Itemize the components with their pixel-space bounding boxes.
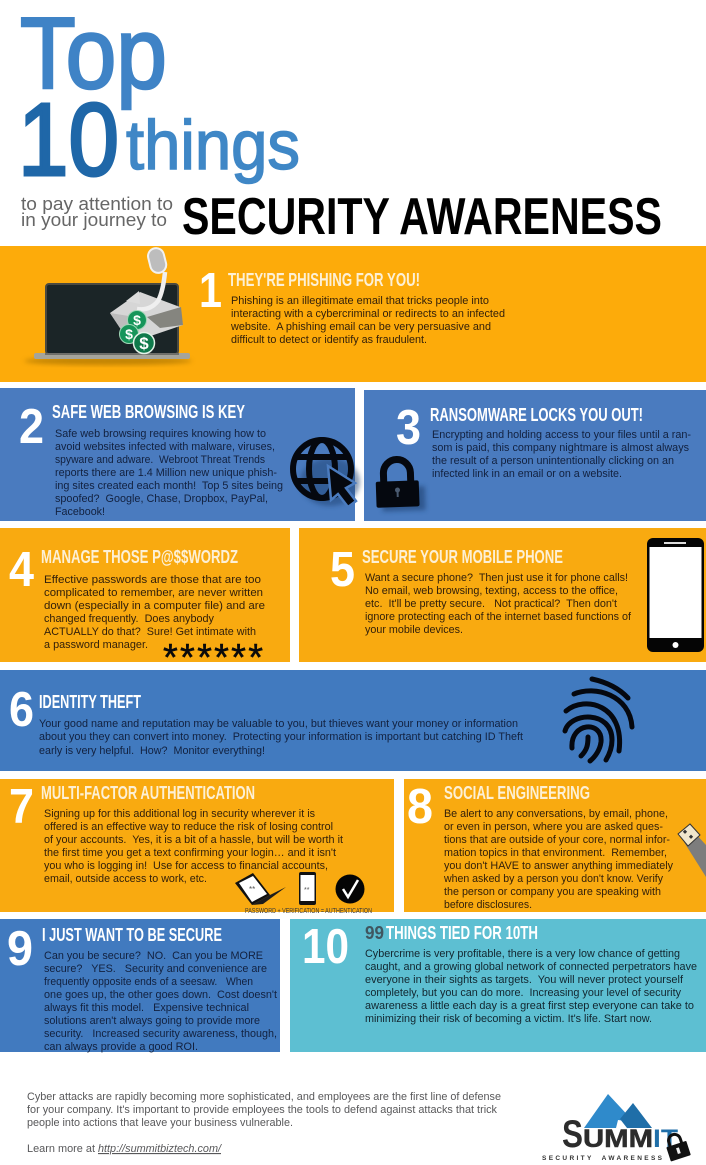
body 2: spoofed? Google, Chase, Dropbox, PayPal, xyxy=(55,493,268,505)
number 10: 10 xyxy=(302,920,349,974)
icon: logo padlock xyxy=(663,1131,691,1162)
footer text: http://summitbiztech.com/ xyxy=(98,1143,223,1155)
body 10: completely, but you can do more. Increasing your level of security xyxy=(365,987,681,999)
footer text: for your company. It's important to provide employees the tools to defend against attacks that trick xyxy=(27,1104,497,1116)
body 7: you who is logging in! Use for access to financial accounts, xyxy=(44,860,328,872)
subtitle: to pay attention to xyxy=(21,194,173,214)
body 8: the person or company you are speaking with xyxy=(444,886,661,898)
number 5: 5 xyxy=(330,543,355,597)
body 9: security. Increased security awareness, though, xyxy=(44,1028,277,1040)
body 6 xyxy=(39,718,524,757)
body 2: spyware and adware. Webroot Threat Trends xyxy=(55,454,265,466)
icon: check circle xyxy=(336,874,364,904)
body 3: the result of a person unintentionally clicking on an xyxy=(432,455,674,467)
body 5: your mobile devices. xyxy=(365,624,463,636)
body 8: when asked by a person you don't know. Verify xyxy=(443,873,663,885)
title number: 10: 10 xyxy=(18,82,119,197)
body 10 xyxy=(365,948,697,1025)
panel 1: phishing xyxy=(0,246,706,382)
body 10: minimizing their risk of becoming a victim. It's life. Start now. xyxy=(365,1013,652,1025)
body 9: Can you be secure? NO. Can you be MORE xyxy=(44,950,263,962)
icon: laptop with phishing email: $ xyxy=(139,334,149,353)
body 7: of your accounts. Yes, it is a bit of a hassle, but will be worth it xyxy=(44,834,344,846)
body 5 xyxy=(365,572,632,636)
logo: Summit Security Awareness: UMM xyxy=(583,1125,653,1153)
body 4 xyxy=(44,574,265,651)
body 9: secure? YES. Security and convenience are xyxy=(44,963,267,975)
body 2 xyxy=(55,428,283,518)
icon: mini laptop: ** xyxy=(249,885,255,894)
footer text: Learn more at xyxy=(27,1143,96,1155)
body 6: Your good name and reputation may be valuable to you, but thieves want your money or information xyxy=(39,718,518,730)
icon: usb stick xyxy=(678,824,706,877)
panel 2: safe web browsing xyxy=(0,388,360,521)
panel 8: social engineering xyxy=(404,779,706,912)
body 10: Cybercrime is very profitable, there is a very low chance of getting xyxy=(365,948,680,960)
title word: things: things xyxy=(126,106,300,184)
body 9: always fit this model. Expensive technical xyxy=(44,1002,249,1014)
icon: fingerprint xyxy=(565,679,632,761)
body 1 xyxy=(230,295,505,346)
footer text: people into actions that leave your business vulnerable. xyxy=(27,1117,293,1129)
icon: smartphone xyxy=(647,538,704,652)
number 7: 7 xyxy=(9,780,34,834)
logo: Summit Security Awareness: IT xyxy=(653,1125,678,1153)
body 3 xyxy=(432,429,691,480)
number 1: 1 xyxy=(199,264,222,318)
body 10: everyone in their sights as targets. You will never protect yourself xyxy=(365,974,684,986)
heading 9: I JUST WANT TO BE SECURE xyxy=(42,925,222,945)
body 5: No email, web browsing, texting, access to the office, xyxy=(365,585,618,597)
body 4: ACTUALLY do that? Sure! Get intimate with xyxy=(44,626,256,638)
heading 2: SAFE WEB BROWSING IS KEY xyxy=(52,402,245,422)
panel 4: passwords xyxy=(0,528,290,679)
heading 6: IDENTITY THEFT xyxy=(39,692,141,712)
body 10: awareness a little each day is a great first step everyone can take to xyxy=(365,1000,694,1012)
icon: padlock xyxy=(375,459,426,512)
body 2: Facebook! xyxy=(55,506,105,518)
icon: laptop with phishing email: $ xyxy=(133,312,141,328)
body 5: etc. It'll be pretty secure. Not practical? Then don't xyxy=(365,598,618,610)
panel 3: ransomware xyxy=(364,390,706,521)
title xyxy=(18,0,662,246)
title word: Top: Top xyxy=(20,0,167,110)
footer text xyxy=(27,1091,501,1155)
logo: Summit Security Awareness: S xyxy=(562,1113,583,1156)
icon: laptop with phishing email: $ xyxy=(125,326,133,342)
panel 7: multi-factor authentication xyxy=(0,779,394,915)
panel 5: mobile phone xyxy=(299,528,706,662)
body 4: changed frequently. Does anybody xyxy=(44,613,214,625)
icon: mini phone xyxy=(299,872,316,905)
heading 1: THEY'RE PHISHING FOR YOU! xyxy=(228,270,420,290)
body 7: email, outside access to work, etc. xyxy=(44,873,207,885)
body 8: Be alert to any conversations, by email, phone, xyxy=(444,808,668,820)
number 3: 3 xyxy=(396,401,421,455)
body 9: one goes up, the other goes down. Cost doesn't xyxy=(44,989,278,1001)
body 10: caught, and a growing global network of connected perpetrators have xyxy=(365,961,697,973)
body 9: frequently opposite ends of a seesaw. When xyxy=(44,976,253,988)
body 9: solutions aren't always going to provide more xyxy=(44,1015,260,1027)
body 7 xyxy=(44,808,344,885)
number 8: 8 xyxy=(407,780,433,834)
caption: password + verification = authentication: PASSWORD + VERIFICATION = AUTHENTICATION xyxy=(245,906,372,915)
body 2: ing sites created each month! Top 5 sites being xyxy=(55,480,283,492)
panel 6: identity theft xyxy=(0,670,706,771)
subtitle xyxy=(21,194,173,230)
body 1: Phishing is an illegitimate email that tricks people into xyxy=(231,295,489,307)
logo: Summit Security Awareness: SECURITY AWARENESS xyxy=(542,1155,663,1162)
body 8: mation topics in that environment. Remember, xyxy=(444,847,667,859)
number 6: 6 xyxy=(9,683,34,737)
password asterisks: ****** xyxy=(163,637,263,679)
heading 5: SECURE YOUR MOBILE PHONE xyxy=(362,547,563,567)
number 2: 2 xyxy=(19,400,44,454)
body 6: early is very helpful. How? Monitor everything! xyxy=(39,745,265,757)
body 8 xyxy=(443,808,673,911)
body 1: website. A phishing email can be very persuasive and xyxy=(230,321,491,333)
heading 10: 99 xyxy=(365,923,384,943)
body 4: Effective passwords are those that are too xyxy=(44,574,261,586)
body 9: can always provide a good ROI. xyxy=(44,1041,198,1053)
icon: globe with cursor xyxy=(293,440,360,507)
body 2: avoid websites infected with malware, viruses, xyxy=(55,441,275,453)
body 4: a password manager. xyxy=(44,639,148,651)
body 7: Signing up for this additional log in security wherever it is xyxy=(44,808,315,820)
body 8: or even in person, where you are asked ques- xyxy=(444,821,663,833)
body 4: complicated to remember, are never written xyxy=(44,587,263,599)
body 6: about you they can convert into money. Protecting your information is important but catching ID Theft xyxy=(39,731,524,743)
body 7: offered is an effective way to reduce the risk of losing control xyxy=(44,821,333,833)
icon: laptop with phishing email xyxy=(24,246,192,365)
body 3: Encrypting and holding access to your files until a ran- xyxy=(432,429,691,441)
number 4: 4 xyxy=(9,543,34,597)
footer text: Cyber attacks are rapidly becoming more sophisticated, and employees are the first line of defense xyxy=(27,1091,501,1103)
subtitle: in your journey to xyxy=(21,210,167,230)
heading 10 xyxy=(365,923,538,943)
number 9: 9 xyxy=(7,922,33,976)
heading 7: MULTI-FACTOR AUTHENTICATION xyxy=(41,783,255,803)
panel 10: things tied for 10th xyxy=(290,919,706,1052)
body 4: down (especially in a computer file) and are xyxy=(44,600,265,612)
body 5: ignore protecting each of the internet based functions of xyxy=(365,611,632,623)
heading 8: SOCIAL ENGINEERING xyxy=(444,783,590,803)
heading 4: MANAGE THOSE P@$$WORDZ xyxy=(41,547,238,567)
body 1: difficult to detect or identify as fraudulent. xyxy=(231,334,427,346)
body 8: tions that are outside of your core, normal infor- xyxy=(444,834,670,846)
body 9 xyxy=(44,950,278,1053)
logo: Summit Security Awareness xyxy=(542,1094,691,1162)
body 8: you don't HAVE to answer anything immediately xyxy=(444,860,673,872)
body 3: infected link in an email or on a website. xyxy=(432,468,622,480)
heading 10: THINGS TIED FOR 10TH xyxy=(386,923,538,943)
body 2: Safe web browsing requires knowing how to xyxy=(55,428,266,440)
body 2: reports there are 1.4 Million new unique phish- xyxy=(55,467,277,479)
icon: mini laptop xyxy=(235,873,286,905)
body 1: interacting with a cybercriminal or redirects to an infected xyxy=(231,308,505,320)
body 3: som is paid, this company nightmare is almost always xyxy=(432,442,689,454)
panel 9: just want to be secure xyxy=(0,919,280,1053)
body 7: the first time you get a text confirming your login… and it isn't xyxy=(44,847,337,859)
icon: mini phone: ** xyxy=(304,887,310,894)
body 8: before disclosures. xyxy=(444,899,532,911)
body 5: Want a secure phone? Then just use it for phone calls! xyxy=(365,572,628,584)
